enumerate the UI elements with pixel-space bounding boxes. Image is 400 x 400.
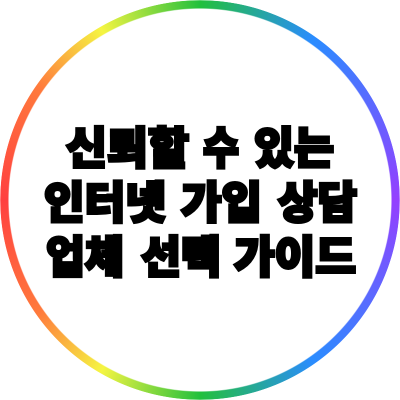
title: 신뢰할 (66, 124, 189, 174)
title: 선택 (141, 234, 221, 282)
title: 수 (203, 124, 239, 174)
title: 인터넷 (44, 179, 166, 228)
title: 상담 (278, 179, 357, 228)
title: 있는 (254, 124, 334, 174)
title: 가이드 (234, 234, 356, 282)
title: 가입 (181, 179, 262, 228)
title: 업체 (46, 234, 124, 282)
